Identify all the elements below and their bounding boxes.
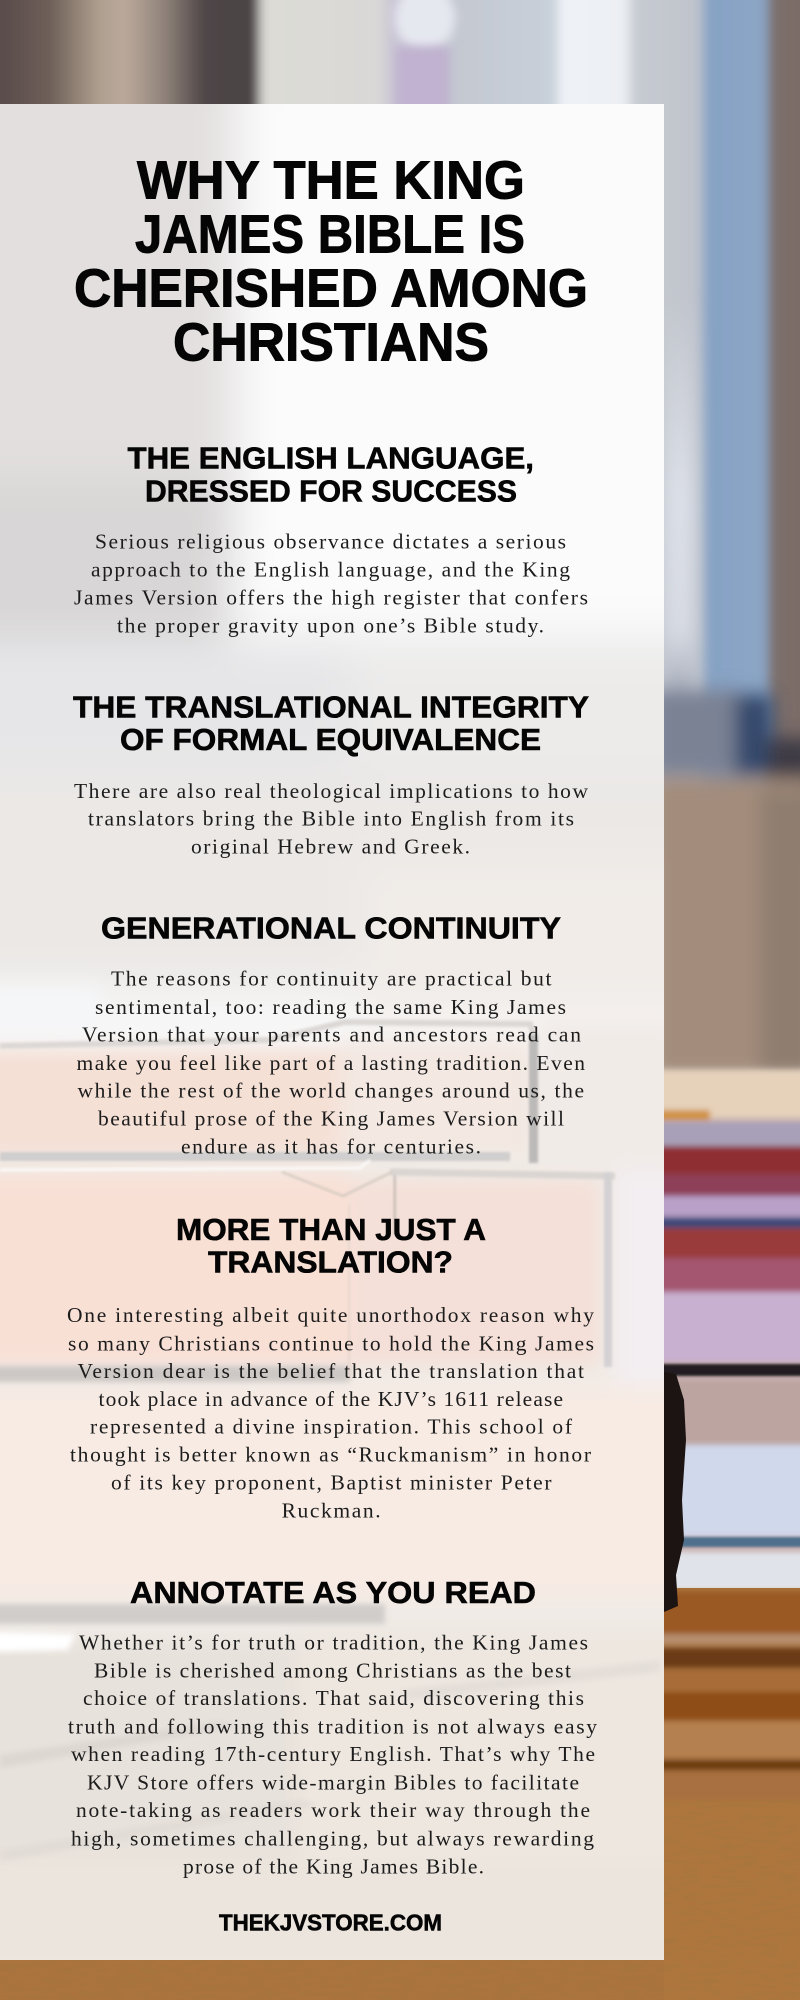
text block: generational continuity: The reasons for continuity are practical but [111,967,552,991]
text block: generational continuity: make you feel like part of a lasting tradition. Even [76,1051,585,1075]
text block: annotate as you read: truth and following this tradition is not always easy [68,1714,597,1738]
text block: more than just a translation [67,1303,594,1523]
text block: the English language: approach to the English language, and the King [91,557,570,581]
text block: annotate as you read: when reading 17th-century English. That’s why The [71,1742,595,1766]
text block: more than just a translation: represented a divine inspiration. This school of [90,1414,573,1438]
text block: annotate as you read [68,1630,597,1879]
text block: annotate as you read: KJV Store offers wide-margin Bibles to facilitate [87,1770,579,1794]
text block: annotate as you read: high, sometimes challenging, but always rewarding [71,1826,594,1850]
text block: more than just a translation: thought is better known as “Ruckmanism” in honor [70,1443,591,1467]
text block: translational integrity: translators bring the Bible into English from its [88,807,574,831]
heading: generational continuity: GENERATIONAL CONTINUITY [101,910,561,945]
panel: translucent white content card [0,104,664,1960]
heading: the English language: THE ENGLISH LANGUAGE, [128,440,534,475]
text block: the English language: James Version offers the high register that confers [74,585,588,609]
text block: annotate as you read: prose of the King James Bible. [183,1855,484,1879]
text block: more than just a translation: Ruckman. [282,1499,381,1523]
text block: more than just a translation: One interesting albeit quite unorthodox reason why [67,1303,594,1327]
text block: annotate as you read: Bible is cherished among Christians as the best [94,1658,571,1682]
text block: more than just a translation: of its key proponent, Baptist minister Peter [111,1470,552,1494]
title [74,151,588,373]
text block: generational continuity [76,967,585,1158]
text block: the English language [74,529,588,638]
text block: more than just a translation: so many Christians continue to hold the King James [68,1331,594,1355]
text block: translational integrity: original Hebrew and Greek. [191,834,470,858]
heading: more than just a translation: MORE THAN JUST A [176,1212,486,1247]
heading: translational integrity: THE TRANSLATIONAL INTEGRITY [73,690,589,725]
text block: more than just a translation: took place in advance of the KJV’s 1611 release [98,1387,563,1411]
text block: generational continuity: endure as it has for centuries. [181,1134,481,1158]
title: CHERISHED AMONG [74,258,588,318]
text block: annotate as you read: choice of translations. That said, discovering this [83,1686,584,1710]
heading: annotate as you read: ANNOTATE AS YOU READ [130,1575,536,1610]
heading: the English language [128,440,534,509]
text block: annotate as you read: note-taking as readers work their way through the [76,1798,590,1822]
text block: annotate as you read: Whether it’s for truth or tradition, the King James [79,1630,588,1654]
text block: translational integrity: There are also real theological implications to how [74,779,588,803]
text block: generational continuity: while the rest of the world changes around us, the [78,1078,584,1102]
title: WHY THE KING [137,151,525,211]
heading: translational integrity [73,690,589,757]
heading: more than just a translation [176,1212,486,1279]
text block: translational integrity [74,779,588,858]
text block: the English language: Serious religious observance dictates a serious [95,529,566,553]
text block: generational continuity: beautiful prose of the King James Version will [98,1107,564,1131]
text block: generational continuity: sentimental, too: reading the same King James [95,995,566,1019]
title: CHRISTIANS [173,313,489,373]
heading: the English language: DRESSED FOR SUCCESS [145,474,517,509]
footer website: THEKJVSTORE.COM [219,1910,442,1936]
text block: generational continuity: Version that your parents and ancestors read can [82,1023,581,1047]
heading: more than just a translation: TRANSLATION? [208,1244,453,1279]
heading: translational integrity: OF FORMAL EQUIVALENCE [120,722,541,757]
text block: more than just a translation: Version dear is the belief that the translation that [78,1359,584,1383]
title: JAMES BIBLE IS [135,204,525,264]
text block: the English language: the proper gravity upon one’s Bible study. [117,614,544,638]
